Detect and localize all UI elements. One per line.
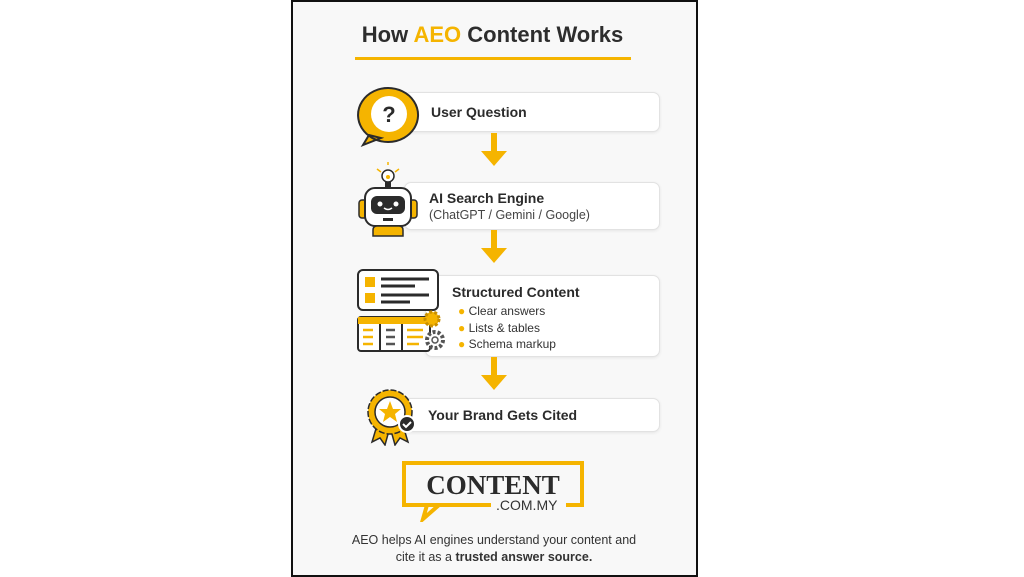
step 2 box: AI search engine — [404, 182, 660, 230]
step 1 box: user question — [404, 92, 660, 132]
footer text: cite it as a trusted answer source. — [396, 550, 592, 564]
bullet list — [458, 304, 556, 351]
icon: question speech bubble — [357, 87, 420, 147]
arrow 3 — [481, 357, 507, 390]
frame panel — [291, 0, 698, 577]
step 3 box: structured content — [425, 275, 660, 357]
bullet list: ● Schema markup — [458, 337, 556, 351]
arrow 2 — [481, 230, 507, 263]
logo: CONTENT.COM.MY — [402, 461, 584, 522]
icon: robot — [358, 162, 418, 237]
icon: question speech bubble: ? — [382, 102, 396, 127]
footer text — [352, 533, 636, 564]
step 1 box: user question: User Question — [431, 104, 527, 120]
step 4 box: brand gets cited — [400, 398, 660, 432]
title underline — [355, 57, 631, 60]
heading: Structured Content — [452, 284, 580, 300]
step 2 box: AI search engine: AI Search Engine — [429, 190, 544, 206]
step 2 box: AI search engine: (ChatGPT / Gemini / Google) — [429, 208, 590, 222]
icon: document with table and gears — [357, 269, 445, 352]
icon: award badge — [367, 389, 414, 446]
logo: CONTENT.COM.MY: .COM.MY — [496, 497, 557, 513]
bullet list: ● Lists & tables — [458, 320, 540, 334]
step 4 box: brand gets cited: Your Brand Gets Cited — [428, 407, 577, 423]
arrow 1 — [481, 133, 507, 166]
title: How AEO Content Works — [362, 22, 623, 47]
footer text: AEO helps AI engines understand your content and — [352, 533, 636, 547]
logo: CONTENT.COM.MY: CONTENT — [426, 470, 560, 500]
bullet list: ● Clear answers — [458, 304, 545, 318]
